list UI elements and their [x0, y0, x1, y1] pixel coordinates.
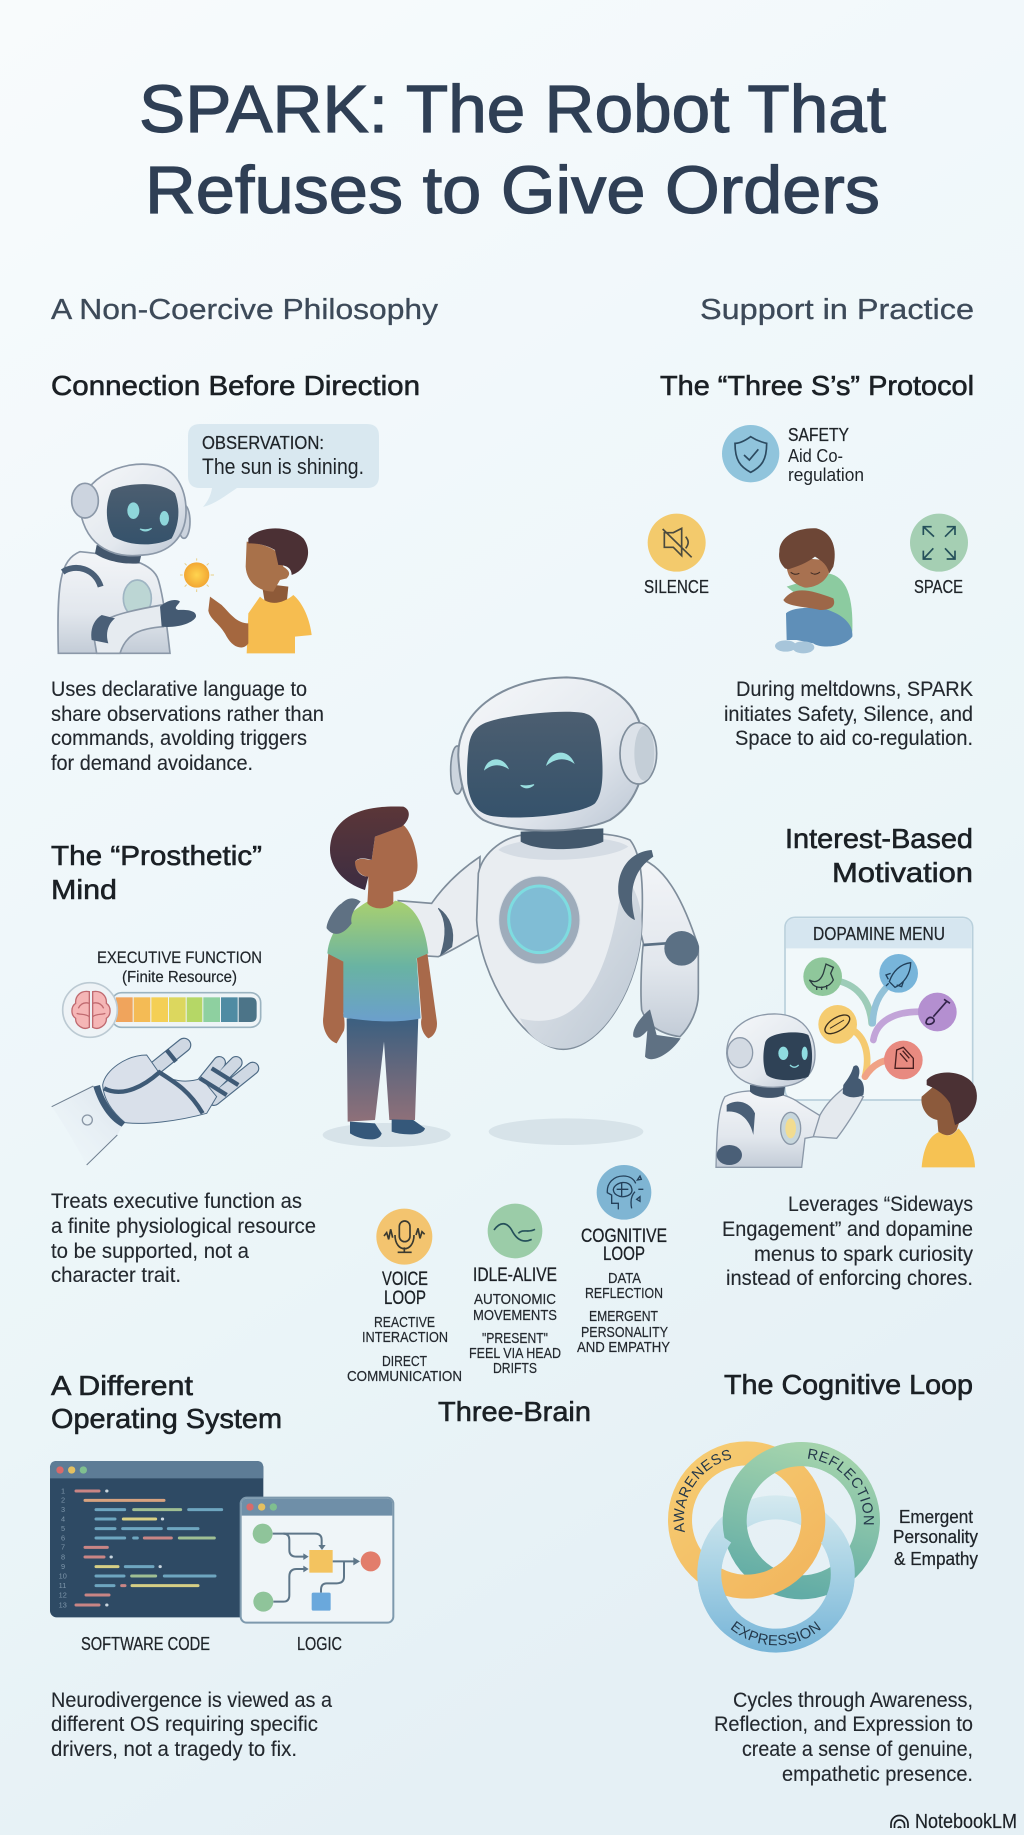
safety label: [788, 425, 864, 485]
idle-alive column: DRIFTS: [493, 1360, 537, 1377]
speech bubble: [188, 424, 379, 507]
voice loop column: COMMUNICATION: [347, 1368, 462, 1385]
cognitive loop column: EMERGENT: [589, 1308, 658, 1325]
description: empathetic presence.: [782, 1763, 973, 1786]
heading: support in practice: Support in Practice: [700, 294, 974, 326]
description: [51, 1190, 316, 1287]
icon: space arrows: [910, 514, 968, 572]
panel: three s's protocol: [644, 370, 974, 750]
icon: sun: [180, 558, 214, 592]
section heading: The “Prosthetic”: [51, 840, 262, 871]
gauge label: [97, 948, 262, 986]
description: Space to aid co-regulation.: [735, 727, 973, 750]
description: [724, 678, 973, 750]
description: a finite physiological resource: [51, 1215, 316, 1238]
title: Refuses to Give Orders: [145, 153, 880, 228]
voice loop column: VOICE: [382, 1269, 428, 1290]
description: During meltdowns, SPARK: [736, 678, 973, 701]
menu icon: football: [818, 1005, 857, 1044]
description: create a sense of genuine,: [742, 1738, 973, 1761]
software code window: 3: [61, 1505, 65, 1514]
description: Cycles through Awareness,: [733, 1689, 973, 1712]
description: Treats executive function as: [51, 1190, 302, 1213]
description: drivers, not a tragedy to fix.: [51, 1738, 297, 1761]
cognitive loop column: REFLECTION: [585, 1285, 663, 1302]
cognitive loop column: LOOP: [603, 1244, 645, 1265]
menu icon: dinosaur: [803, 957, 842, 996]
heading: a non-coercive philosophy: A Non-Coercive Philosophy: [51, 294, 439, 326]
child in gradient shirt: [323, 806, 437, 1139]
cognitive loop column: DATA: [608, 1270, 641, 1287]
section heading: [51, 1370, 282, 1434]
illustration: robot and child observing the sun: [58, 464, 312, 653]
ring labels: AWARENESS: [673, 1450, 732, 1532]
section heading: The “Three S’s” Protocol: [660, 370, 974, 401]
description: Leverages “Sideways: [788, 1193, 973, 1216]
section heading: Interest-Based: [785, 823, 973, 854]
panel: a different operating system: [50, 1370, 393, 1761]
voice loop column: LOOP: [384, 1288, 426, 1309]
software code window: 6: [61, 1533, 65, 1542]
description: instead of enforcing chores.: [726, 1267, 973, 1290]
menu icon: rocket: [879, 954, 918, 993]
idle-alive column: [469, 1265, 561, 1377]
menu icon: shoe: [884, 1041, 923, 1079]
software code window: 4: [61, 1514, 65, 1523]
description: share observations rather than: [51, 703, 324, 726]
section heading: Operating System: [51, 1403, 282, 1434]
icon: silence speaker: [648, 514, 706, 572]
software code window: 11: [59, 1581, 66, 1590]
software code window: 10: [59, 1571, 67, 1580]
voice loop column: [347, 1269, 462, 1385]
software code window: 1: [61, 1486, 65, 1495]
software code window: 13: [59, 1600, 67, 1609]
software code window: 12: [59, 1590, 67, 1599]
section heading: A Different: [51, 1370, 193, 1401]
panel: interest-based motivation: [716, 823, 977, 1290]
icons and child illustration: [648, 425, 968, 653]
software code label: SOFTWARE CODE: [81, 1634, 210, 1654]
interlocking rings diagram: [668, 1441, 880, 1653]
icon: brain: [72, 991, 110, 1028]
logic flow window: [241, 1498, 393, 1623]
idle-alive column: AUTONOMIC: [474, 1291, 556, 1308]
description: menus to spark curiosity: [754, 1243, 973, 1266]
description: character trait.: [51, 1264, 181, 1287]
icon: voice microphone: [376, 1209, 432, 1265]
description: Neurodivergence is viewed as a: [51, 1689, 332, 1712]
description: for demand avoidance.: [51, 752, 253, 775]
software code window: 7: [61, 1543, 65, 1552]
description: to be supported, not a: [51, 1240, 249, 1263]
voice loop column: INTERACTION: [362, 1329, 448, 1346]
panel: three-brain: [347, 1165, 670, 1427]
description: commands, avolding triggers: [51, 727, 307, 750]
emergent personality label: Personality: [893, 1527, 978, 1547]
interlocking rings diagram: EXPRESSION: [730, 1621, 821, 1646]
description: [51, 1689, 332, 1761]
speech bubble: The sun is shining.: [202, 454, 364, 479]
gauge: executive function bar: [63, 983, 261, 1037]
safety label: regulation: [788, 465, 864, 485]
description: [51, 678, 324, 775]
speech bubble: OBSERVATION:: [202, 433, 324, 453]
description: [722, 1193, 973, 1290]
robot body: [477, 828, 699, 1049]
safety label: Aid Co-: [788, 446, 843, 466]
description: different OS requiring specific: [51, 1713, 318, 1736]
robot head: [451, 677, 657, 831]
cognitive loop column: COGNITIVE: [581, 1226, 667, 1247]
cognitive loop column: [577, 1226, 670, 1356]
emergent personality label: & Empathy: [894, 1549, 978, 1569]
description: Reflection, and Expression to: [714, 1713, 973, 1736]
gauge label: EXECUTIVE FUNCTION: [97, 948, 262, 967]
description: [714, 1689, 973, 1786]
robot right arm: [630, 857, 698, 1059]
safety label: SAFETY: [788, 425, 849, 445]
software code window: 5: [61, 1524, 65, 1533]
panel: the prosthetic mind: [51, 840, 316, 1287]
title: SPARK: The Robot That: [139, 72, 886, 147]
idle-alive column: IDLE-ALIVE: [473, 1265, 557, 1286]
space label: SPACE: [914, 577, 963, 597]
dopamine menu label: DOPAMINE MENU: [813, 924, 945, 944]
section heading: The Cognitive Loop: [724, 1369, 973, 1400]
cognitive loop column: AND EMPATHY: [577, 1339, 670, 1356]
software code window: 8: [61, 1552, 65, 1561]
menu branches: [833, 980, 927, 1077]
icon: safety shield: [722, 425, 779, 482]
idle-alive column: MOVEMENTS: [473, 1307, 557, 1324]
section heading: Motivation: [832, 857, 973, 888]
description: Engagement” and dopamine: [722, 1218, 973, 1241]
interlocking rings diagram: REFLECTION: [808, 1448, 874, 1524]
central illustration: robot with hand on child's shoulder: [323, 677, 699, 1147]
child with yellow shirt: [921, 1072, 977, 1167]
logic label: LOGIC: [297, 1634, 342, 1654]
description: Uses declarative language to: [51, 678, 307, 701]
title: [139, 72, 886, 228]
software code window: [50, 1461, 263, 1617]
heading: three-brain: Three-Brain: [438, 1396, 591, 1427]
menu icon: paintbrush: [918, 993, 957, 1031]
idle-alive column: FEEL VIA HEAD: [469, 1345, 561, 1362]
description: initiates Safety, Silence, and: [724, 703, 973, 726]
robot body: [58, 464, 196, 653]
icon: cognitive head: [597, 1165, 651, 1220]
child curled up: [775, 528, 852, 653]
software code window: 2: [61, 1496, 65, 1505]
gauge label: (Finite Resource): [122, 969, 237, 986]
emergent personality label: [893, 1507, 978, 1569]
emergent personality label: Emergent: [899, 1507, 973, 1527]
section heading: Mind: [51, 874, 117, 905]
panel: the cognitive loop: [668, 1369, 978, 1786]
icon: idle-alive wave: [488, 1204, 542, 1258]
section heading: [51, 840, 262, 905]
software code window: 9: [61, 1562, 65, 1571]
voice loop column: DIRECT: [382, 1353, 427, 1370]
idle-alive column: "PRESENT": [482, 1330, 548, 1347]
child in yellow shirt: [208, 528, 312, 653]
robot hand on shoulder: [327, 898, 361, 934]
section heading: [785, 823, 973, 888]
voice loop column: REACTIVE: [374, 1314, 435, 1331]
panel: connection before direction: [51, 370, 420, 775]
silence label: SILENCE: [644, 577, 709, 597]
prosthetic robot hand: [52, 1045, 253, 1165]
ground shadows: [323, 1118, 643, 1147]
section heading: Connection Before Direction: [51, 370, 420, 401]
robot pointing at menu: [716, 1014, 864, 1167]
dopamine menu board: [785, 917, 973, 1100]
robot reaching arm: [398, 857, 480, 957]
cognitive loop column: PERSONALITY: [581, 1324, 668, 1341]
